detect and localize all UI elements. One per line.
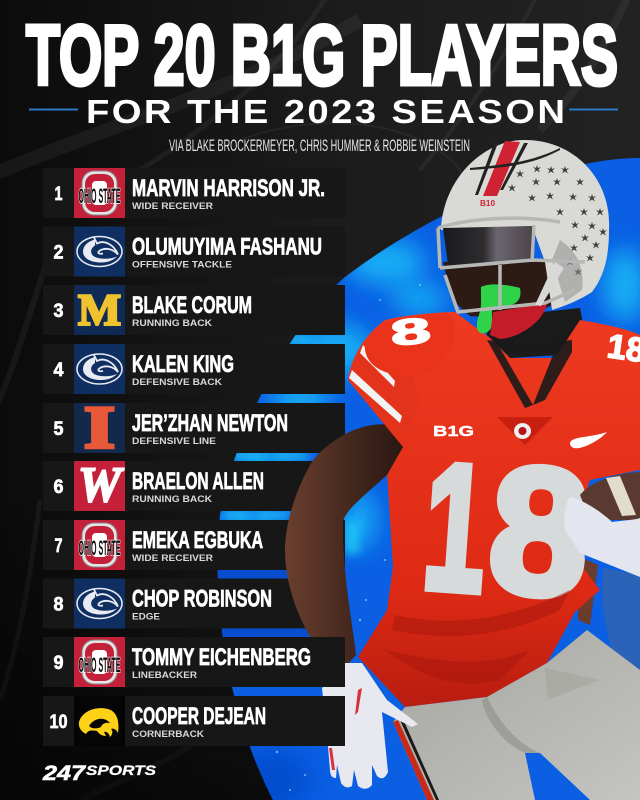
player: jersey logos: B1G [433, 423, 474, 440]
row 9: Tommy Eichenberg [43, 637, 345, 687]
row 2: Olumuyima Fashanu: 2 [54, 242, 64, 264]
row 10: Cooper DeJean: 10 [50, 711, 68, 733]
row 4: Kalen King: 4 [54, 359, 64, 381]
logo: Iowa [74, 696, 125, 746]
player: arm [285, 424, 403, 665]
row 10: Cooper DeJean: CORNERBACK [132, 729, 204, 740]
player: jersey [348, 312, 640, 707]
player: jersey logos [433, 417, 607, 448]
player: chest number [417, 426, 595, 636]
logo: Illinois: I [84, 394, 115, 460]
row 7: Emeka Egbuka: OHIO STATE [78, 537, 120, 560]
row 7: Emeka Egbuka [43, 520, 345, 570]
player: facemask [438, 218, 585, 312]
row 3: Blake Corum: 3 [54, 300, 64, 322]
row 7: Emeka Egbuka: 7 [54, 535, 62, 557]
row 8: Chop Robinson: CHOP ROBINSON [132, 586, 272, 612]
player: visor [443, 226, 533, 265]
row 2: Olumuyima Fashanu: OLUMUYIMA FASHANU [132, 234, 322, 260]
row 9: Tommy Eichenberg: LINEBACKER [132, 670, 197, 681]
row 2: Olumuyima Fashanu [43, 226, 345, 276]
row 2: Olumuyima Fashanu: OFFENSIVE TACKLE [132, 260, 232, 270]
player: jersey folds [385, 590, 570, 684]
logo: Ohio State [74, 637, 125, 687]
row 8: Chop Robinson: 8 [54, 594, 64, 616]
row 1: Marvin Harrison Jr. [43, 168, 345, 218]
player: chin guard [490, 303, 547, 339]
player: neck and collar [487, 308, 585, 358]
row 4: Kalen King: DEFENSIVE BACK [132, 377, 222, 388]
logo: Ohio State [74, 168, 125, 218]
row 7: Emeka Egbuka: EMEKA EGBUKA [132, 527, 263, 554]
row 8: Chop Robinson: EDGE [132, 612, 160, 622]
player photo illustration [285, 140, 640, 800]
player: chest number: 1 [417, 426, 493, 631]
row 1: Marvin Harrison Jr.: WIDE RECEIVER [132, 201, 213, 212]
row 3: Blake Corum: BLAKE CORUM [132, 292, 252, 319]
logo: Illinois [74, 394, 125, 460]
row 6: Braelon Allen: BRAELON ALLEN [132, 468, 264, 495]
row 1: Marvin Harrison Jr.: OHIO STATE [78, 185, 120, 208]
row 3: Blake Corum [43, 285, 345, 335]
logo: Wisconsin: W [78, 456, 124, 512]
row 5: Jer'Zhan Newton [43, 394, 345, 460]
player: ball [580, 472, 640, 520]
row 10: Cooper DeJean: COOPER DEJEAN [132, 703, 266, 730]
logo: Penn State [74, 578, 125, 628]
player: shoulder pad number: 8 [389, 309, 433, 354]
row 5: Jer'Zhan Newton: 5 [54, 418, 64, 440]
player: ball stripe [606, 476, 636, 516]
player: far forearm and opponent sleeve [578, 556, 640, 672]
player: mouthguard [477, 284, 520, 333]
logo: Penn State [74, 226, 125, 276]
row 6: Braelon Allen: RUNNING BACK [132, 494, 212, 505]
player: face and chin shadow [443, 258, 560, 320]
player: helmet side strap [535, 262, 564, 306]
player: pants [393, 630, 640, 800]
subtitle: FOR THE 2023 SEASON [86, 93, 565, 130]
row 7: Emeka Egbuka: WIDE RECEIVER [132, 553, 213, 564]
logo: 247 Sports: SPORTS [86, 762, 157, 778]
row 6: Braelon Allen [43, 456, 345, 512]
row 4: Kalen King: KALEN KING [132, 351, 234, 378]
row 5: Jer'Zhan Newton: JER’ZHAN NEWTON [132, 410, 288, 437]
row 3: Blake Corum: RUNNING BACK [132, 318, 212, 329]
logo: 247 Sports: 247 [42, 762, 87, 785]
logo: Michigan: M [78, 286, 121, 334]
row 9: Tommy Eichenberg: 9 [54, 652, 64, 674]
player: shoulder pad number [365, 309, 640, 375]
blue energy circle behind player [200, 150, 640, 800]
player: carrying glove [564, 497, 640, 577]
row 4: Kalen King [43, 344, 345, 394]
player: lower glove [322, 663, 418, 789]
player: chest number: 8 [483, 428, 595, 636]
player: jersey collar V [487, 340, 572, 408]
row 6: Braelon Allen: 6 [54, 476, 64, 498]
row 9: Tommy Eichenberg: OHIO STATE [78, 654, 120, 677]
logo: 247 Sports [42, 762, 157, 785]
player: helmet shell [441, 140, 609, 310]
row 9: Tommy Eichenberg: TOMMY EICHENBERG [132, 644, 311, 671]
logo: Ohio State [74, 520, 125, 570]
row 1: Marvin Harrison Jr.: MARVIN HARRISON JR. [132, 175, 325, 202]
logo: Penn State [74, 344, 125, 394]
row 8: Chop Robinson [43, 578, 345, 628]
row 5: Jer'Zhan Newton: DEFENSIVE LINE [132, 436, 216, 447]
row 1: Marvin Harrison Jr.: 1 [54, 183, 63, 205]
row 10: Cooper DeJean [43, 696, 345, 746]
player: sleeve [348, 322, 420, 447]
player: helmet front bumper text: B10 [480, 199, 496, 208]
